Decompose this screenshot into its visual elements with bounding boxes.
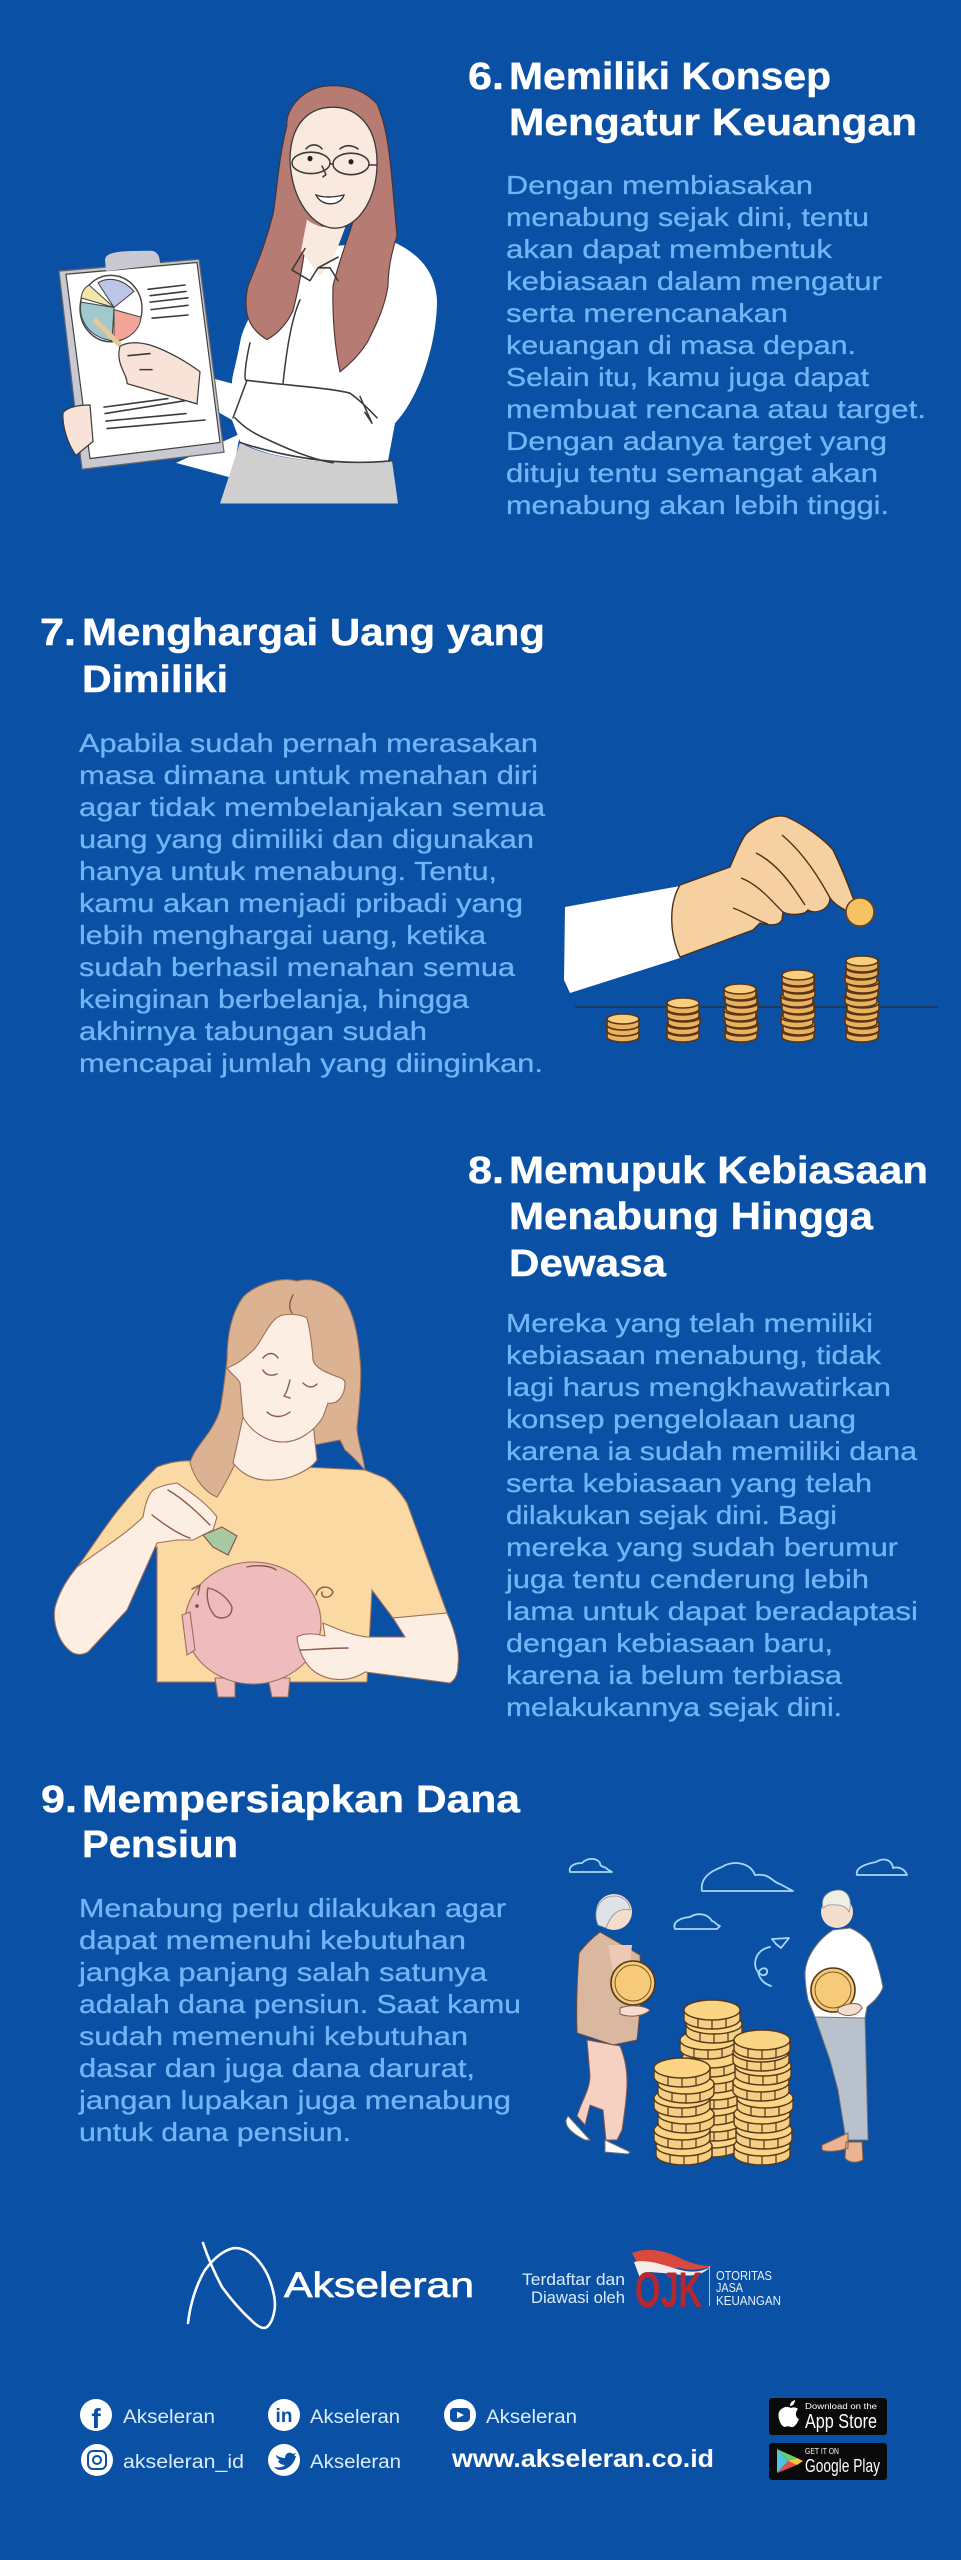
logo: Akseleran: Akseleran	[284, 2266, 474, 2305]
text block 6: membuat rencana atau target.	[506, 394, 926, 424]
logo: OJK: JASA	[716, 2280, 743, 2295]
heading 7: Dimiliki	[82, 659, 228, 701]
text block 7: mencapai jumlah yang diinginkan.	[79, 1048, 543, 1078]
text block 8: mereka yang sudah berumur	[506, 1532, 898, 1562]
text block 6: Dengan adanya target yang	[506, 426, 887, 456]
illustration: woman presenting clipboard with pie chart	[59, 86, 437, 504]
social: LinkedIn: in	[276, 2406, 292, 2427]
text block 9: Menabung perlu dilakukan agar	[79, 1893, 506, 1923]
text block 6: menabung sejak dini, tentu	[506, 202, 869, 232]
text block 9: sudah memenuhi kebutuhan	[79, 2021, 468, 2051]
social: Facebook: Akseleran	[123, 2407, 215, 2428]
text block 6: kebiasaan dalam mengatur	[506, 266, 882, 296]
text block 8: dengan kebiasaan baru,	[506, 1628, 833, 1658]
badge: App Store: App Store	[805, 2411, 877, 2433]
glasses and smile	[292, 145, 377, 204]
shirt lines	[197, 249, 392, 463]
social: LinkedIn	[268, 2399, 400, 2431]
heading 8: Memupuk Kebiasaan	[509, 1150, 928, 1192]
heading 9: Mempersiapkan Dana	[82, 1779, 521, 1821]
clouds	[570, 1859, 907, 1929]
coin stacks	[607, 956, 879, 1042]
heading 6: 6.	[468, 56, 504, 98]
text block 6: akan dapat membentuk	[506, 234, 833, 264]
text block 9: dasar dan juga dana darurat,	[79, 2053, 475, 2083]
social: YouTube	[444, 2399, 577, 2431]
clipboard	[59, 251, 224, 469]
badge: App Store	[769, 2398, 887, 2435]
right coin stack	[733, 2030, 793, 2165]
text block 6: serta merencanakan	[506, 298, 788, 328]
left coin stack	[654, 2058, 714, 2165]
face	[227, 1314, 345, 1442]
logo: OJK: OTORITAS	[716, 2268, 772, 2283]
text block 6: keuangan di masa depan.	[506, 330, 856, 360]
middle coin stack	[680, 2000, 742, 2157]
text block 9: untuk dana pensiun.	[79, 2117, 351, 2147]
text block 8: karena ia sudah memiliki dana	[506, 1436, 918, 1466]
registration text: Terdaftar dan	[522, 2270, 625, 2289]
heading 8: Menabung Hingga	[509, 1196, 874, 1238]
neck	[233, 1417, 317, 1480]
pie chart	[80, 275, 142, 345]
hands	[119, 343, 200, 404]
illustration: girl with piggy bank	[54, 1280, 458, 1697]
social: Facebook: f	[91, 2403, 101, 2434]
paper plane	[755, 1938, 789, 1986]
social: Twitter	[268, 2444, 401, 2476]
text block 7: keinginan berbelanja, hingga	[79, 984, 470, 1014]
heading 7: Menghargai Uang yang	[82, 612, 545, 654]
face	[290, 107, 377, 228]
heading 7	[40, 612, 545, 701]
text block 6	[506, 170, 926, 520]
heading 8	[468, 1150, 928, 1285]
social: Twitter: Akseleran	[310, 2452, 401, 2473]
text block 8: juga tentu cenderung lebih	[505, 1564, 869, 1594]
text block 8: melakukannya sejak dini.	[506, 1692, 842, 1722]
piggy bank	[182, 1562, 333, 1697]
hair	[246, 86, 397, 372]
hand	[672, 816, 856, 957]
text block 6: menabung akan lebih tinggi.	[506, 490, 889, 520]
text block 6: dituju tentu semangat akan	[506, 458, 878, 488]
badge: Google Play: Google Play	[805, 2456, 880, 2476]
text block 9: jangan lupakan juga menabung	[78, 2085, 511, 2115]
social: Facebook	[80, 2399, 215, 2434]
text block 7: uang yang dimiliki dan digunakan	[79, 824, 534, 854]
registration text: Diawasi oleh	[531, 2288, 625, 2307]
illustration: retired couple with coin stacks	[566, 1859, 907, 2165]
registration text	[522, 2270, 625, 2307]
text block 7: lebih menghargai uang, ketika	[79, 920, 487, 950]
text block 7: Apabila sudah pernah merasakan	[79, 728, 538, 758]
text block 9: jangka panjang salah satunya	[78, 1957, 488, 1987]
banknote	[203, 1527, 237, 1555]
left arm and hand	[54, 1483, 217, 1654]
heading 6: Memiliki Konsep	[509, 56, 831, 98]
text block 8: lama untuk dapat beradaptasi	[506, 1596, 918, 1626]
text block 7: sudah berhasil menahan semua	[79, 952, 516, 982]
hair	[190, 1280, 365, 1497]
text block 7: akhirnya tabungan sudah	[79, 1016, 427, 1046]
text block 7: masa dimana untuk menahan diri	[79, 760, 538, 790]
text block 8: karena ia belum terbiasa	[506, 1660, 843, 1690]
sleeve	[564, 886, 680, 993]
heading 9: Pensiun	[82, 1824, 238, 1866]
heading 9: 9.	[41, 1779, 77, 1821]
falling coin	[846, 898, 874, 926]
text block 9: adalah dana pensiun. Saat kamu	[79, 1989, 521, 2019]
neck	[301, 212, 351, 276]
text block 6: Selain itu, kamu juga dapat	[506, 362, 870, 392]
right arm and hand	[297, 1613, 458, 1683]
heading 6	[468, 56, 917, 144]
skirt	[220, 442, 398, 504]
text block 8: serta kebiasaan yang telah	[506, 1468, 872, 1498]
text block 7	[79, 728, 546, 1078]
text block 8: kebiasaan menabung, tidak	[506, 1340, 882, 1370]
heading 8: Dewasa	[509, 1243, 667, 1285]
logo: OJK: KEUANGAN	[716, 2293, 781, 2308]
heading 6: Mengatur Keuangan	[509, 102, 917, 144]
social: LinkedIn: Akseleran	[310, 2407, 400, 2428]
shirt	[77, 1461, 447, 1682]
man	[805, 1890, 883, 2162]
text block 7: hanya untuk menabung. Tentu,	[79, 856, 497, 886]
text block 8: lagi harus mengkhawatirkan	[506, 1372, 891, 1402]
badge: App Store: Download on the	[805, 2402, 878, 2411]
text block 9: dapat memenuhi kebutuhan	[79, 1925, 466, 1955]
text block 6: Dengan membiasakan	[506, 170, 813, 200]
text block 7: agar tidak membelanjakan semua	[79, 792, 546, 822]
website: www.akseleran.co.id	[451, 2445, 714, 2473]
illustration: hand stacking coins	[564, 816, 938, 1042]
badge: Google Play: GET IT ON	[805, 2447, 839, 2456]
text block 9	[78, 1893, 521, 2147]
text block 8	[505, 1308, 918, 1722]
logo: OJK	[632, 2250, 781, 2318]
heading 9	[41, 1779, 521, 1866]
social: YouTube: Akseleran	[486, 2407, 577, 2428]
social: Instagram: akseleran_id	[123, 2452, 244, 2473]
shirt	[200, 241, 437, 463]
text block 8: konsep pengelolaan uang	[506, 1404, 856, 1434]
heading 7: 7.	[40, 612, 76, 654]
heading 8: 8.	[468, 1150, 504, 1192]
woman	[566, 1894, 655, 2154]
social: Instagram	[81, 2444, 244, 2476]
text block 8: dilakukan sejak dini. Bagi	[506, 1500, 837, 1530]
logo: Akseleran	[188, 2243, 474, 2328]
text block 8: Mereka yang telah memiliki	[506, 1308, 873, 1338]
badge: Google Play	[769, 2443, 887, 2480]
text block 7: kamu akan menjadi pribadi yang	[79, 888, 523, 918]
logo: OJK: OJK	[635, 2262, 702, 2318]
